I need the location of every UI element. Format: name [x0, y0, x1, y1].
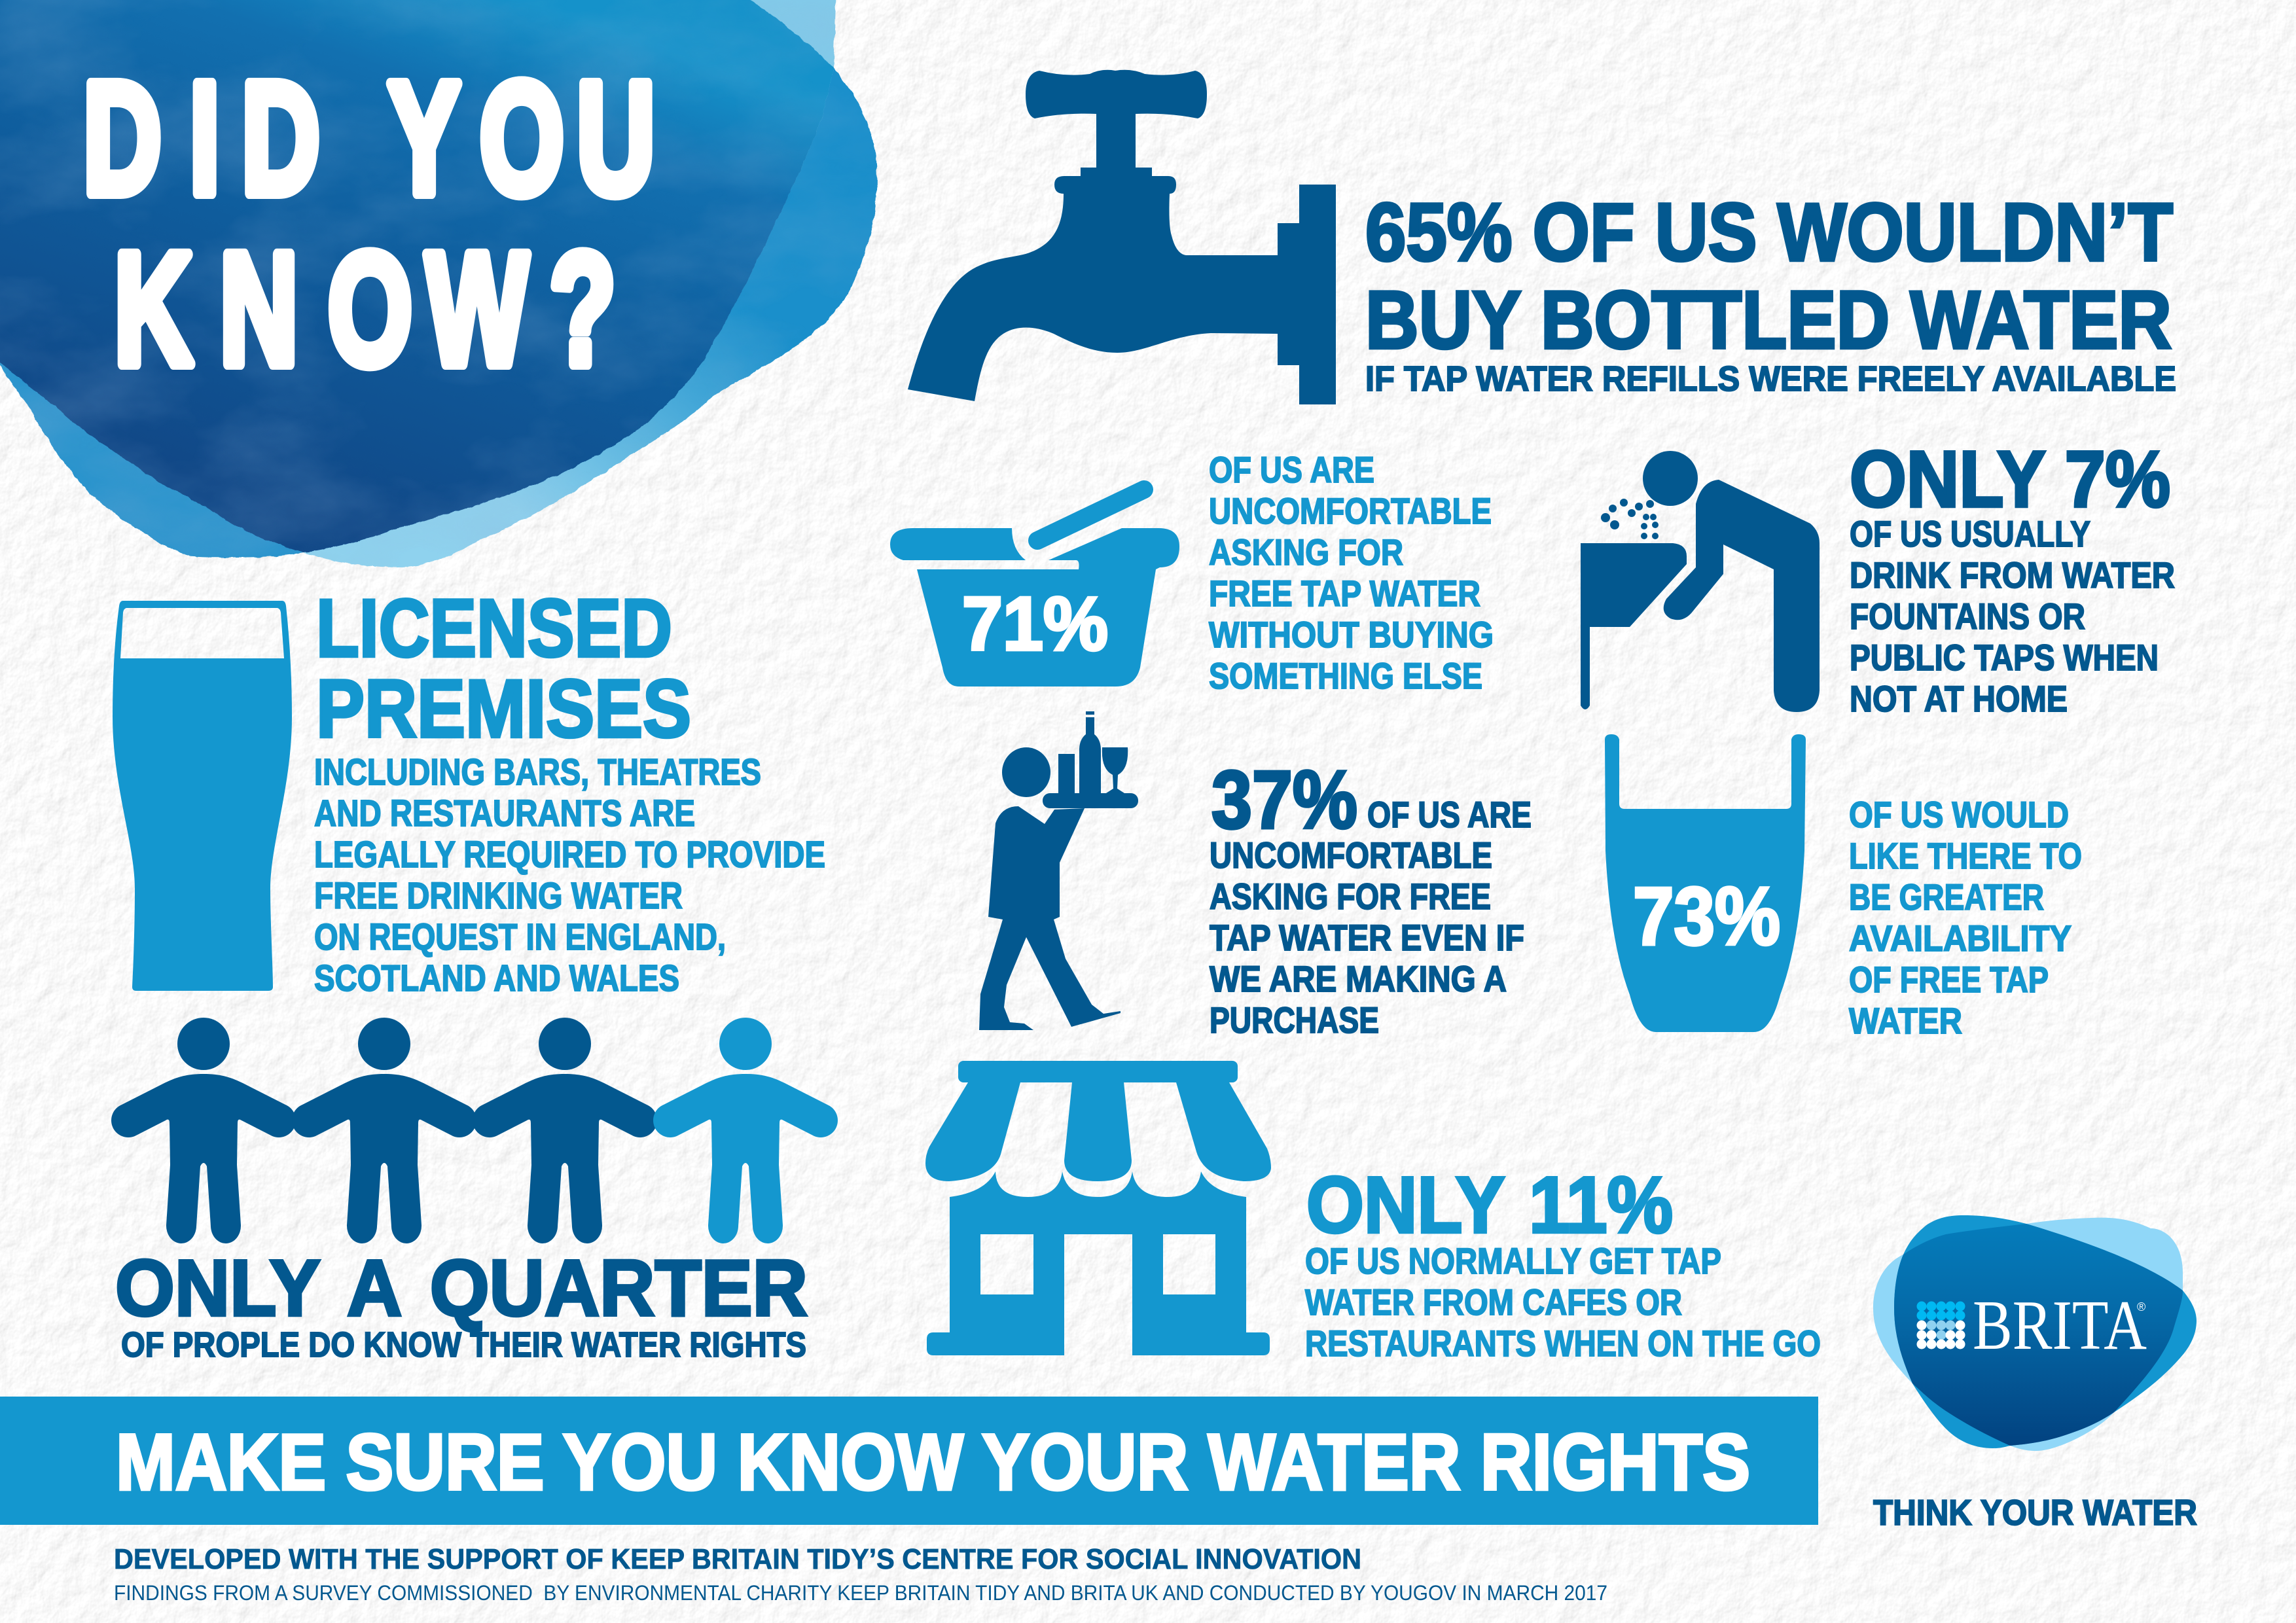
text block: 37%: TAP WATER EVEN IF: [1210, 917, 1524, 958]
text block: licensed premises: LICENSED: [316, 583, 672, 674]
title: did you know: KNOW?: [115, 221, 616, 399]
text block: only a quarter: ONLY A QUARTER: [115, 1243, 808, 1332]
text block: 37%: WE ARE MAKING A: [1210, 958, 1507, 999]
text block: 73% would like: [1849, 794, 2082, 1041]
person 1: [111, 1018, 296, 1243]
text block: 37%: 37%: [1211, 755, 1357, 846]
text block: licensed premises: LEGALLY REQUIRED TO PROVIDE: [314, 834, 825, 876]
text block: only a quarter: OF PROPLE DO KNOW THEIR WATER RIGHTS: [121, 1325, 806, 1364]
text block: 73% would like: OF US WOULD: [1849, 794, 2069, 835]
text block: only 7%: [1850, 435, 2175, 719]
text block: 71% uncomfortable: WITHOUT BUYING: [1209, 614, 1494, 655]
text block: 71% uncomfortable: SOMETHING ELSE: [1209, 655, 1482, 696]
icon: shopping basket 71%: [890, 490, 1179, 687]
banner: make sure you know your water rights: [0, 1397, 1818, 1525]
title: did you know: DID YOU: [83, 50, 655, 228]
icon: person at water fountain: [1581, 451, 1820, 712]
title: did you know: [83, 50, 655, 399]
text block: only 11%: ONLY 11%: [1306, 1160, 1673, 1249]
heading: 65% stat: IF TAP WATER REFILLS WERE FREELY AVAILABLE: [1365, 359, 2176, 399]
text block: licensed premises: [314, 583, 825, 999]
icon: tap: [908, 70, 1336, 404]
text block: only 11%: OF US NORMALLY GET TAP: [1305, 1240, 1721, 1281]
logo: brita: [1873, 1215, 2197, 1451]
heading: 65% stat: 65% OF US WOULDN’T: [1365, 187, 2173, 278]
text block: 73% would like: WATER: [1849, 1000, 1962, 1041]
icon: water glass 73%: [1605, 734, 1806, 1032]
logo: brita: BRITA: [1973, 1287, 2147, 1364]
text block: 73% would like: AVAILABILITY: [1849, 918, 2072, 959]
text block: only 7%: ONLY 7%: [1850, 435, 2170, 524]
icon: shop front: [925, 1061, 1271, 1355]
text block: only 7%: OF US USUALLY: [1850, 513, 2090, 554]
text block: 71% uncomfortable: OF US ARE: [1209, 449, 1374, 490]
text block: licensed premises: PREMISES: [316, 664, 691, 755]
icon: waiter with tray: [979, 711, 1138, 1030]
text block: 37%: PURCHASE: [1210, 999, 1379, 1041]
text block: only 11%: WATER FROM CAFES OR: [1305, 1281, 1682, 1323]
text block: 71% uncomfortable: ASKING FOR: [1209, 531, 1403, 573]
person 3: [473, 1018, 657, 1243]
icon: shopping basket 71%: 71%: [962, 581, 1108, 666]
watercolour blob: [0, 0, 877, 567]
text block: 71% uncomfortable: [1209, 449, 1494, 696]
text block: licensed premises: INCLUDING BARS, THEATRES: [314, 751, 761, 793]
text block: 73% would like: OF FREE TAP: [1849, 959, 2049, 1000]
icon: pint glass: [113, 601, 292, 991]
text block: 71% uncomfortable: UNCOMFORTABLE: [1209, 490, 1492, 531]
heading: 65% stat: [1365, 187, 2176, 399]
text block: licensed premises: SCOTLAND AND WALES: [314, 957, 679, 999]
logo: brita: ®: [2137, 1300, 2145, 1313]
text block: only 7%: NOT AT HOME: [1850, 678, 2068, 719]
text block: only 7%: PUBLIC TAPS WHEN: [1850, 637, 2159, 678]
text block: 37%: OF US ARE: [1367, 794, 1532, 835]
text block: 73% would like: BE GREATER: [1849, 876, 2044, 918]
footer: credits: FINDINGS FROM A SURVEY COMMISSIONED BY ENVIRONMENTAL CHARITY KEEP BRITAIN TIDY AND BRITA UK AND CONDUCTED BY YOUGOV IN MARCH 2017: [114, 1581, 1607, 1605]
icon: row of four people: [111, 1018, 838, 1243]
text block: 71% uncomfortable: FREE TAP WATER: [1209, 573, 1480, 614]
footer: credits: DEVELOPED WITH THE SUPPORT OF KEEP BRITAIN TIDY’S CENTRE FOR SOCIAL INNOVATION: [114, 1543, 1361, 1575]
icon: water glass 73%: 73%: [1633, 871, 1780, 962]
text block: licensed premises: FREE DRINKING WATER: [314, 875, 683, 917]
heading: 65% stat: BUY BOTTLED WATER: [1365, 275, 2172, 366]
text block: only 11%: RESTAURANTS WHEN ON THE GO: [1305, 1323, 1821, 1364]
text block: licensed premises: ON REQUEST IN ENGLAND,: [314, 916, 726, 958]
text block: only 7%: FOUNTAINS OR: [1850, 596, 2085, 637]
banner: make sure you know your water rights: MAKE SURE YOU KNOW YOUR WATER RIGHTS: [116, 1418, 1750, 1507]
text block: 73% would like: LIKE THERE TO: [1849, 835, 2082, 876]
person 2: [292, 1018, 476, 1243]
text block: only 11%: [1305, 1160, 1821, 1364]
text block: 37%: ASKING FOR FREE: [1210, 876, 1491, 917]
text block: 37%: UNCOMFORTABLE: [1210, 834, 1492, 876]
text block: 37%: [1210, 755, 1532, 1041]
tagline: think your water: THINK YOUR WATER: [1873, 1492, 2197, 1533]
text block: only 7%: DRINK FROM WATER: [1850, 554, 2175, 596]
person 4: [653, 1018, 838, 1243]
text block: licensed premises: AND RESTAURANTS ARE: [314, 793, 695, 834]
footer: credits: [114, 1543, 1607, 1605]
